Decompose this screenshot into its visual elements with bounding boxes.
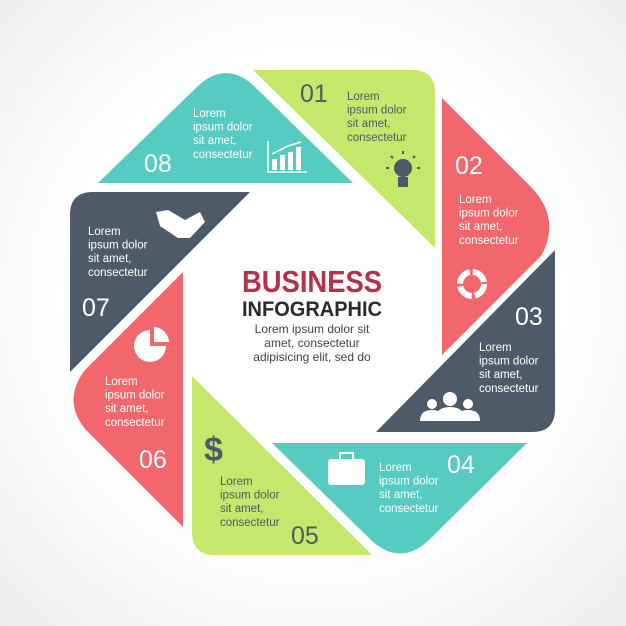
segment 08 — [98, 73, 353, 183]
center title — [242, 264, 382, 364]
text 01: Lorem — [347, 91, 380, 103]
icon: light bulb — [386, 151, 420, 187]
subtitle: INFOGRAPHIC — [242, 298, 382, 321]
segment 01 — [253, 70, 435, 248]
text 01: consectetur — [347, 132, 407, 144]
icon: dollar: $ — [204, 431, 223, 469]
text 01: sit amet, — [347, 118, 390, 130]
text 06: sit amet, — [105, 403, 148, 415]
text 02: sit amet, — [459, 221, 502, 233]
text 06: Lorem — [105, 376, 138, 388]
text 02: ipsum dolor — [459, 208, 519, 220]
segment 06 — [74, 272, 183, 527]
icon: people — [420, 392, 480, 421]
text 08: ipsum dolor — [193, 122, 253, 134]
text 08: Lorem — [193, 108, 226, 120]
number 03: 03 — [515, 303, 543, 331]
number 06: 06 — [139, 446, 167, 474]
text 06: consectetur — [105, 417, 165, 429]
segment 07 — [70, 192, 250, 372]
icon: cycle — [460, 272, 484, 296]
number 05: 05 — [291, 522, 319, 550]
text 06: ipsum dolor — [105, 390, 165, 402]
text 08: consectetur — [193, 149, 253, 161]
icon: bar chart — [268, 141, 307, 172]
segment 04 — [272, 443, 527, 554]
icon: handshake — [156, 210, 205, 238]
text 04: sit amet, — [379, 489, 422, 501]
text 04: ipsum dolor — [379, 476, 439, 488]
segment 02 — [442, 98, 549, 355]
text 07: sit amet, — [88, 253, 131, 265]
number 04: 04 — [447, 451, 475, 479]
text 03: sit amet, — [479, 369, 522, 381]
center body text: Lorem ipsum dolor sit — [255, 322, 370, 336]
text 07: consectetur — [88, 267, 148, 279]
icon: briefcase — [328, 453, 365, 485]
text 08: sit amet, — [193, 135, 236, 147]
number 08: 08 — [144, 150, 172, 178]
text 03: Lorem — [479, 342, 512, 354]
center title: BUSINESS — [242, 264, 382, 299]
icon: pie chart — [134, 327, 169, 362]
text 02: consectetur — [459, 235, 519, 247]
text 05: ipsum dolor — [220, 490, 280, 502]
text 07: Lorem — [88, 226, 121, 238]
text 04: consectetur — [379, 503, 439, 515]
text 05: consectetur — [220, 517, 280, 529]
text 02: Lorem — [459, 194, 492, 206]
number 01: 01 — [300, 80, 328, 108]
number 07: 07 — [82, 294, 110, 322]
number 02: 02 — [455, 152, 483, 180]
text 01: ipsum dolor — [347, 105, 407, 117]
text 05: Lorem — [220, 476, 253, 488]
text 03: consectetur — [479, 383, 539, 395]
text 03: ipsum dolor — [479, 356, 539, 368]
center body text: adipisicing elit, sed do — [253, 350, 371, 364]
text 04: Lorem — [379, 462, 412, 474]
text 05: sit amet, — [220, 503, 263, 515]
segment 05 — [192, 376, 372, 555]
text 07: ipsum dolor — [88, 240, 148, 252]
center body text: amet, consectetur — [264, 336, 360, 350]
segment 03 — [376, 250, 555, 432]
